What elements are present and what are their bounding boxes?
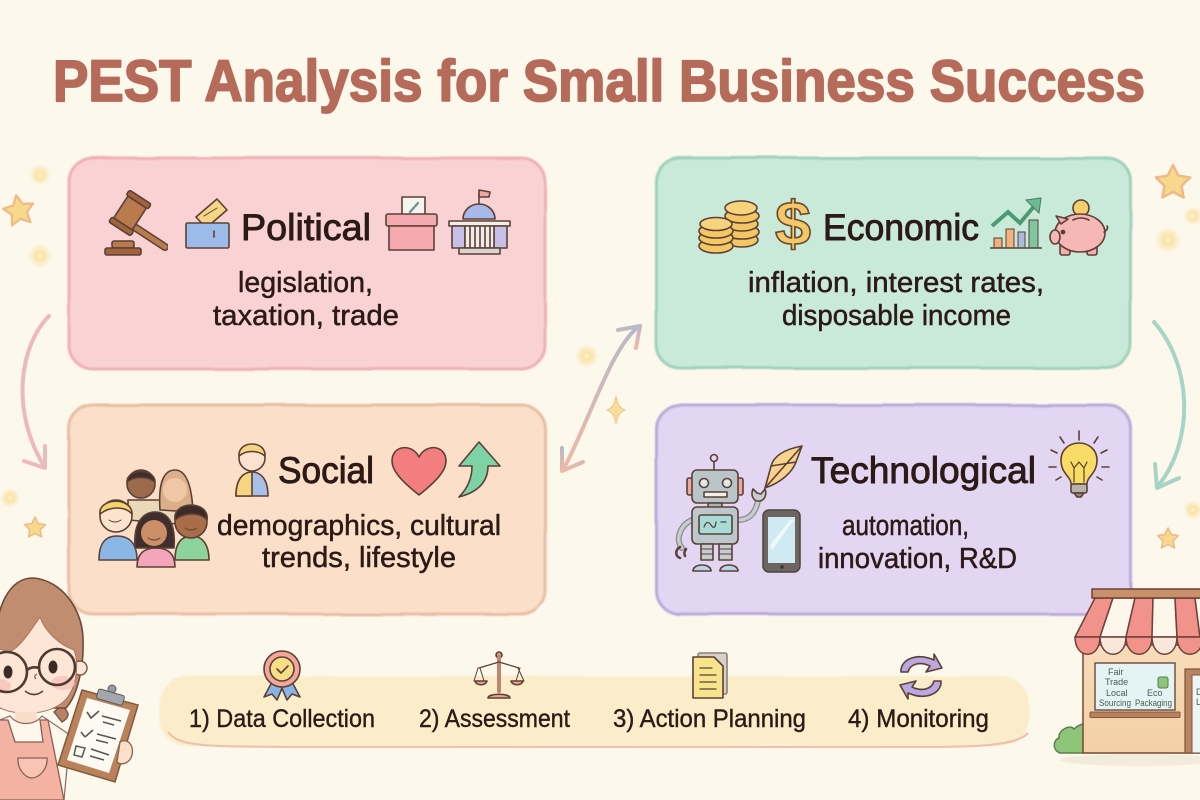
arrow: economic to technological bbox=[1154, 322, 1184, 488]
icon: pink ballot box bbox=[386, 197, 437, 250]
heading: social: Social bbox=[278, 450, 374, 491]
text: social factors bbox=[217, 510, 501, 574]
text: technological factors: automation, bbox=[842, 510, 969, 542]
step: assessment: 2) Assessment bbox=[419, 705, 570, 733]
icon: light bulb bbox=[1049, 431, 1109, 497]
icon: documents bbox=[693, 653, 727, 698]
icon: bush bbox=[1054, 724, 1083, 753]
icon: robot bbox=[676, 454, 766, 571]
icon: kite bbox=[765, 446, 802, 488]
icon: coin stacks bbox=[699, 201, 759, 253]
icon: scales bbox=[474, 652, 524, 698]
arrow: social and economic two-way bbox=[562, 326, 640, 471]
shop window bbox=[1095, 663, 1175, 710]
icon: growth chart bbox=[990, 198, 1042, 248]
icon: person bbox=[236, 444, 268, 496]
text: economic factors bbox=[748, 267, 1044, 332]
text: technological factors: innovation, R&D bbox=[818, 543, 1017, 575]
shop window: Local bbox=[1106, 688, 1128, 698]
heading: political: Political bbox=[241, 207, 371, 248]
icon: phone bbox=[763, 510, 800, 572]
illustration: storefront bbox=[1054, 589, 1200, 766]
shop window: Packaging bbox=[1135, 698, 1172, 708]
illustration: shop owner with clipboard bbox=[0, 578, 138, 800]
step: action planning: 3) Action Planning bbox=[613, 705, 806, 733]
text: social factors: demographics, cultural bbox=[217, 510, 501, 542]
text: economic factors: inflation, interest rates, bbox=[748, 267, 1044, 299]
shop window: Fair bbox=[1108, 667, 1124, 677]
icon: clipboard bbox=[58, 685, 138, 782]
step: data collection: 1) Data Collection bbox=[189, 705, 375, 733]
text: political factors: taxation, trade bbox=[213, 300, 399, 332]
icon: up arrow bbox=[459, 442, 500, 497]
shop window: Eco bbox=[1147, 688, 1163, 698]
text: political factors: legislation, bbox=[238, 267, 373, 299]
text: economic factors: disposable income bbox=[782, 300, 1011, 332]
icon: piggy bank bbox=[1050, 200, 1108, 255]
shop window: Trade bbox=[1105, 677, 1128, 687]
heading: economic: Economic bbox=[823, 207, 979, 248]
icon: heart bbox=[392, 448, 446, 495]
awning bbox=[1075, 589, 1200, 654]
panel: social bbox=[69, 405, 545, 614]
shop window: Sourcing bbox=[1099, 698, 1131, 708]
panel: political bbox=[69, 158, 545, 369]
icon: award ribbon bbox=[264, 651, 300, 700]
icon: refresh cycle bbox=[900, 654, 942, 699]
icon: group of people bbox=[99, 470, 209, 567]
text: political factors bbox=[213, 267, 399, 332]
text: social factors: trends, lifestyle bbox=[262, 542, 456, 574]
panel: economic bbox=[656, 158, 1131, 368]
arrow: political to social bbox=[23, 316, 49, 468]
icon: gavel bbox=[105, 190, 165, 255]
decorative stars and glowing dots bbox=[0, 164, 1200, 548]
panel: process steps bbox=[159, 651, 1029, 747]
icon: dollar sign: $ bbox=[775, 190, 811, 259]
panel: technological bbox=[656, 405, 1131, 614]
heading: technological: Technological bbox=[811, 450, 1036, 491]
icon: capitol building bbox=[449, 190, 510, 254]
text: technological factors bbox=[818, 510, 1017, 575]
step: monitoring: 4) Monitoring bbox=[848, 705, 989, 733]
icon: blue ballot bbox=[186, 199, 229, 248]
